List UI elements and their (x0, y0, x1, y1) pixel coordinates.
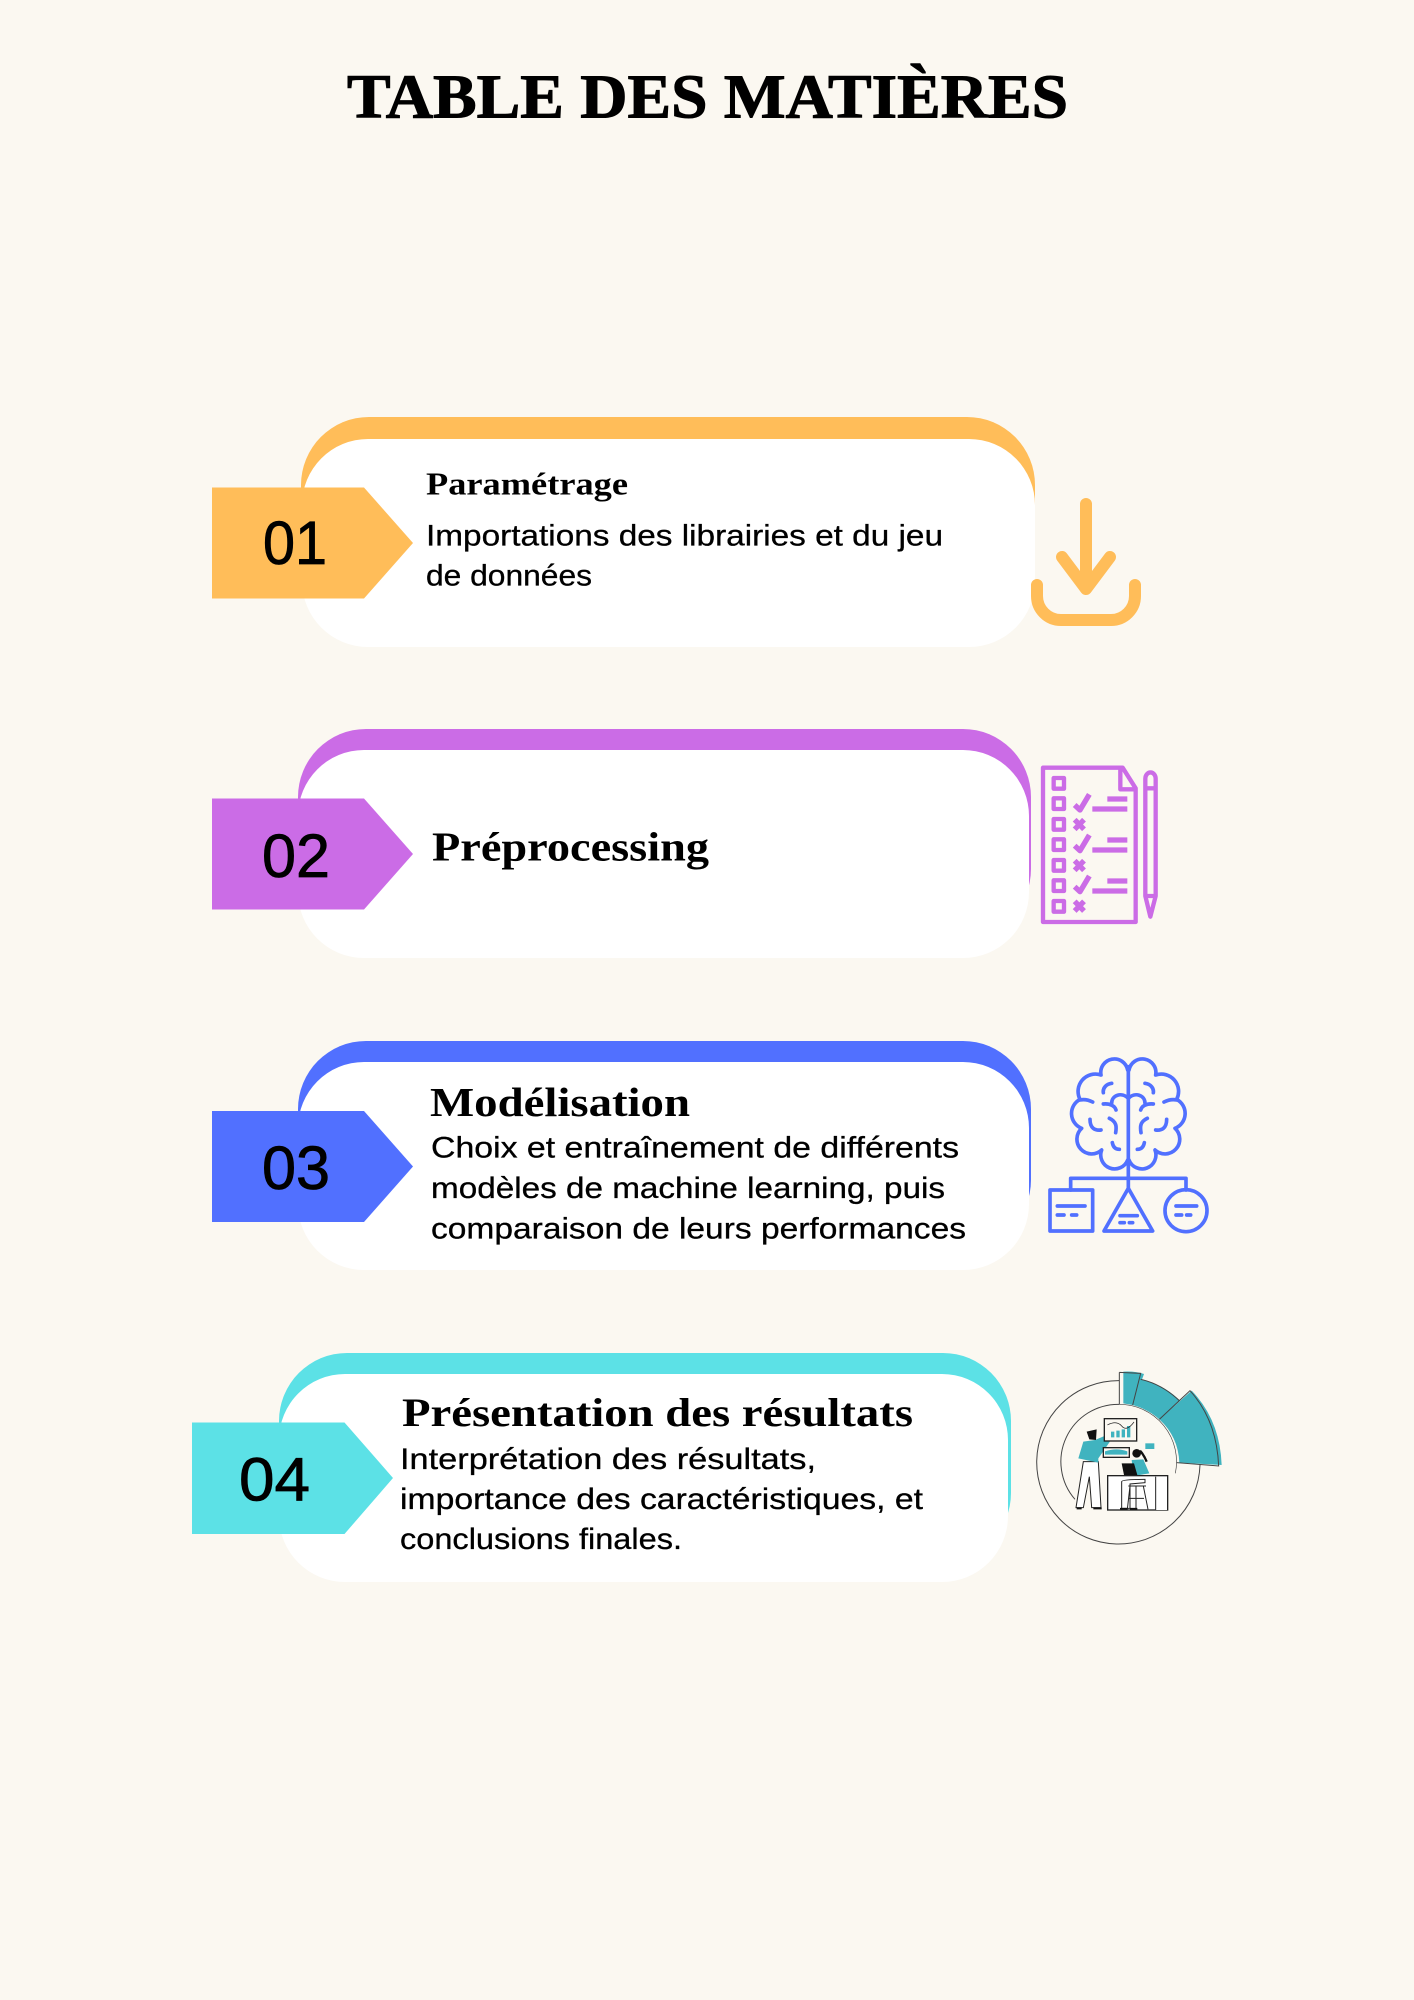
panel: 02 Préprocessing (212, 729, 1031, 958)
man (1076, 1429, 1113, 1508)
description 04: importance des caractéristiques, et (400, 1483, 924, 1516)
description 01: Importations des librairies et du jeu (426, 520, 943, 552)
woman at desk (1108, 1449, 1168, 1510)
number arrow 01 (212, 488, 413, 598)
description 04 (400, 1443, 924, 1556)
number arrow 02 (212, 798, 413, 910)
small chart (1103, 1443, 1154, 1457)
description 04: Interprétation des résultats, (400, 1443, 816, 1476)
description 03: modèles de machine learning, puis (431, 1172, 945, 1205)
icon: download (1037, 504, 1135, 620)
icon: presentation illustration with radial chart (1037, 1372, 1222, 1544)
panel: 01 Paramétrage (212, 417, 1035, 647)
description 03 (431, 1132, 966, 1246)
number 01: 01 (263, 509, 327, 577)
number arrow 04 (192, 1422, 393, 1534)
panel: 03 Modélisation (212, 1041, 1031, 1270)
description 01: de données (426, 560, 592, 592)
heading Paramétrage: Paramétrage (426, 466, 628, 502)
description 03: comparaison de leurs performances (431, 1212, 966, 1246)
number 02: 02 (262, 822, 330, 890)
description 04: conclusions finales. (400, 1523, 682, 1556)
chart board (1104, 1419, 1137, 1441)
description 01 (426, 520, 943, 592)
icon: brain decision tree (1050, 1059, 1207, 1232)
heading Modélisation: Modélisation (430, 1079, 690, 1125)
number 03: 03 (262, 1134, 330, 1202)
description 03: Choix et entraînement de différents (431, 1132, 959, 1164)
heading Présentation des résultats: Présentation des résultats (402, 1390, 913, 1435)
title: TABLE DES MATIÈRES (347, 64, 1068, 132)
panel: 04 Présentation des résultats (192, 1353, 1011, 1582)
heading Préprocessing: Préprocessing (432, 824, 710, 870)
number 04: 04 (239, 1446, 310, 1514)
icon: checklist and pencil (1043, 768, 1156, 922)
number arrow 03 (212, 1111, 413, 1222)
